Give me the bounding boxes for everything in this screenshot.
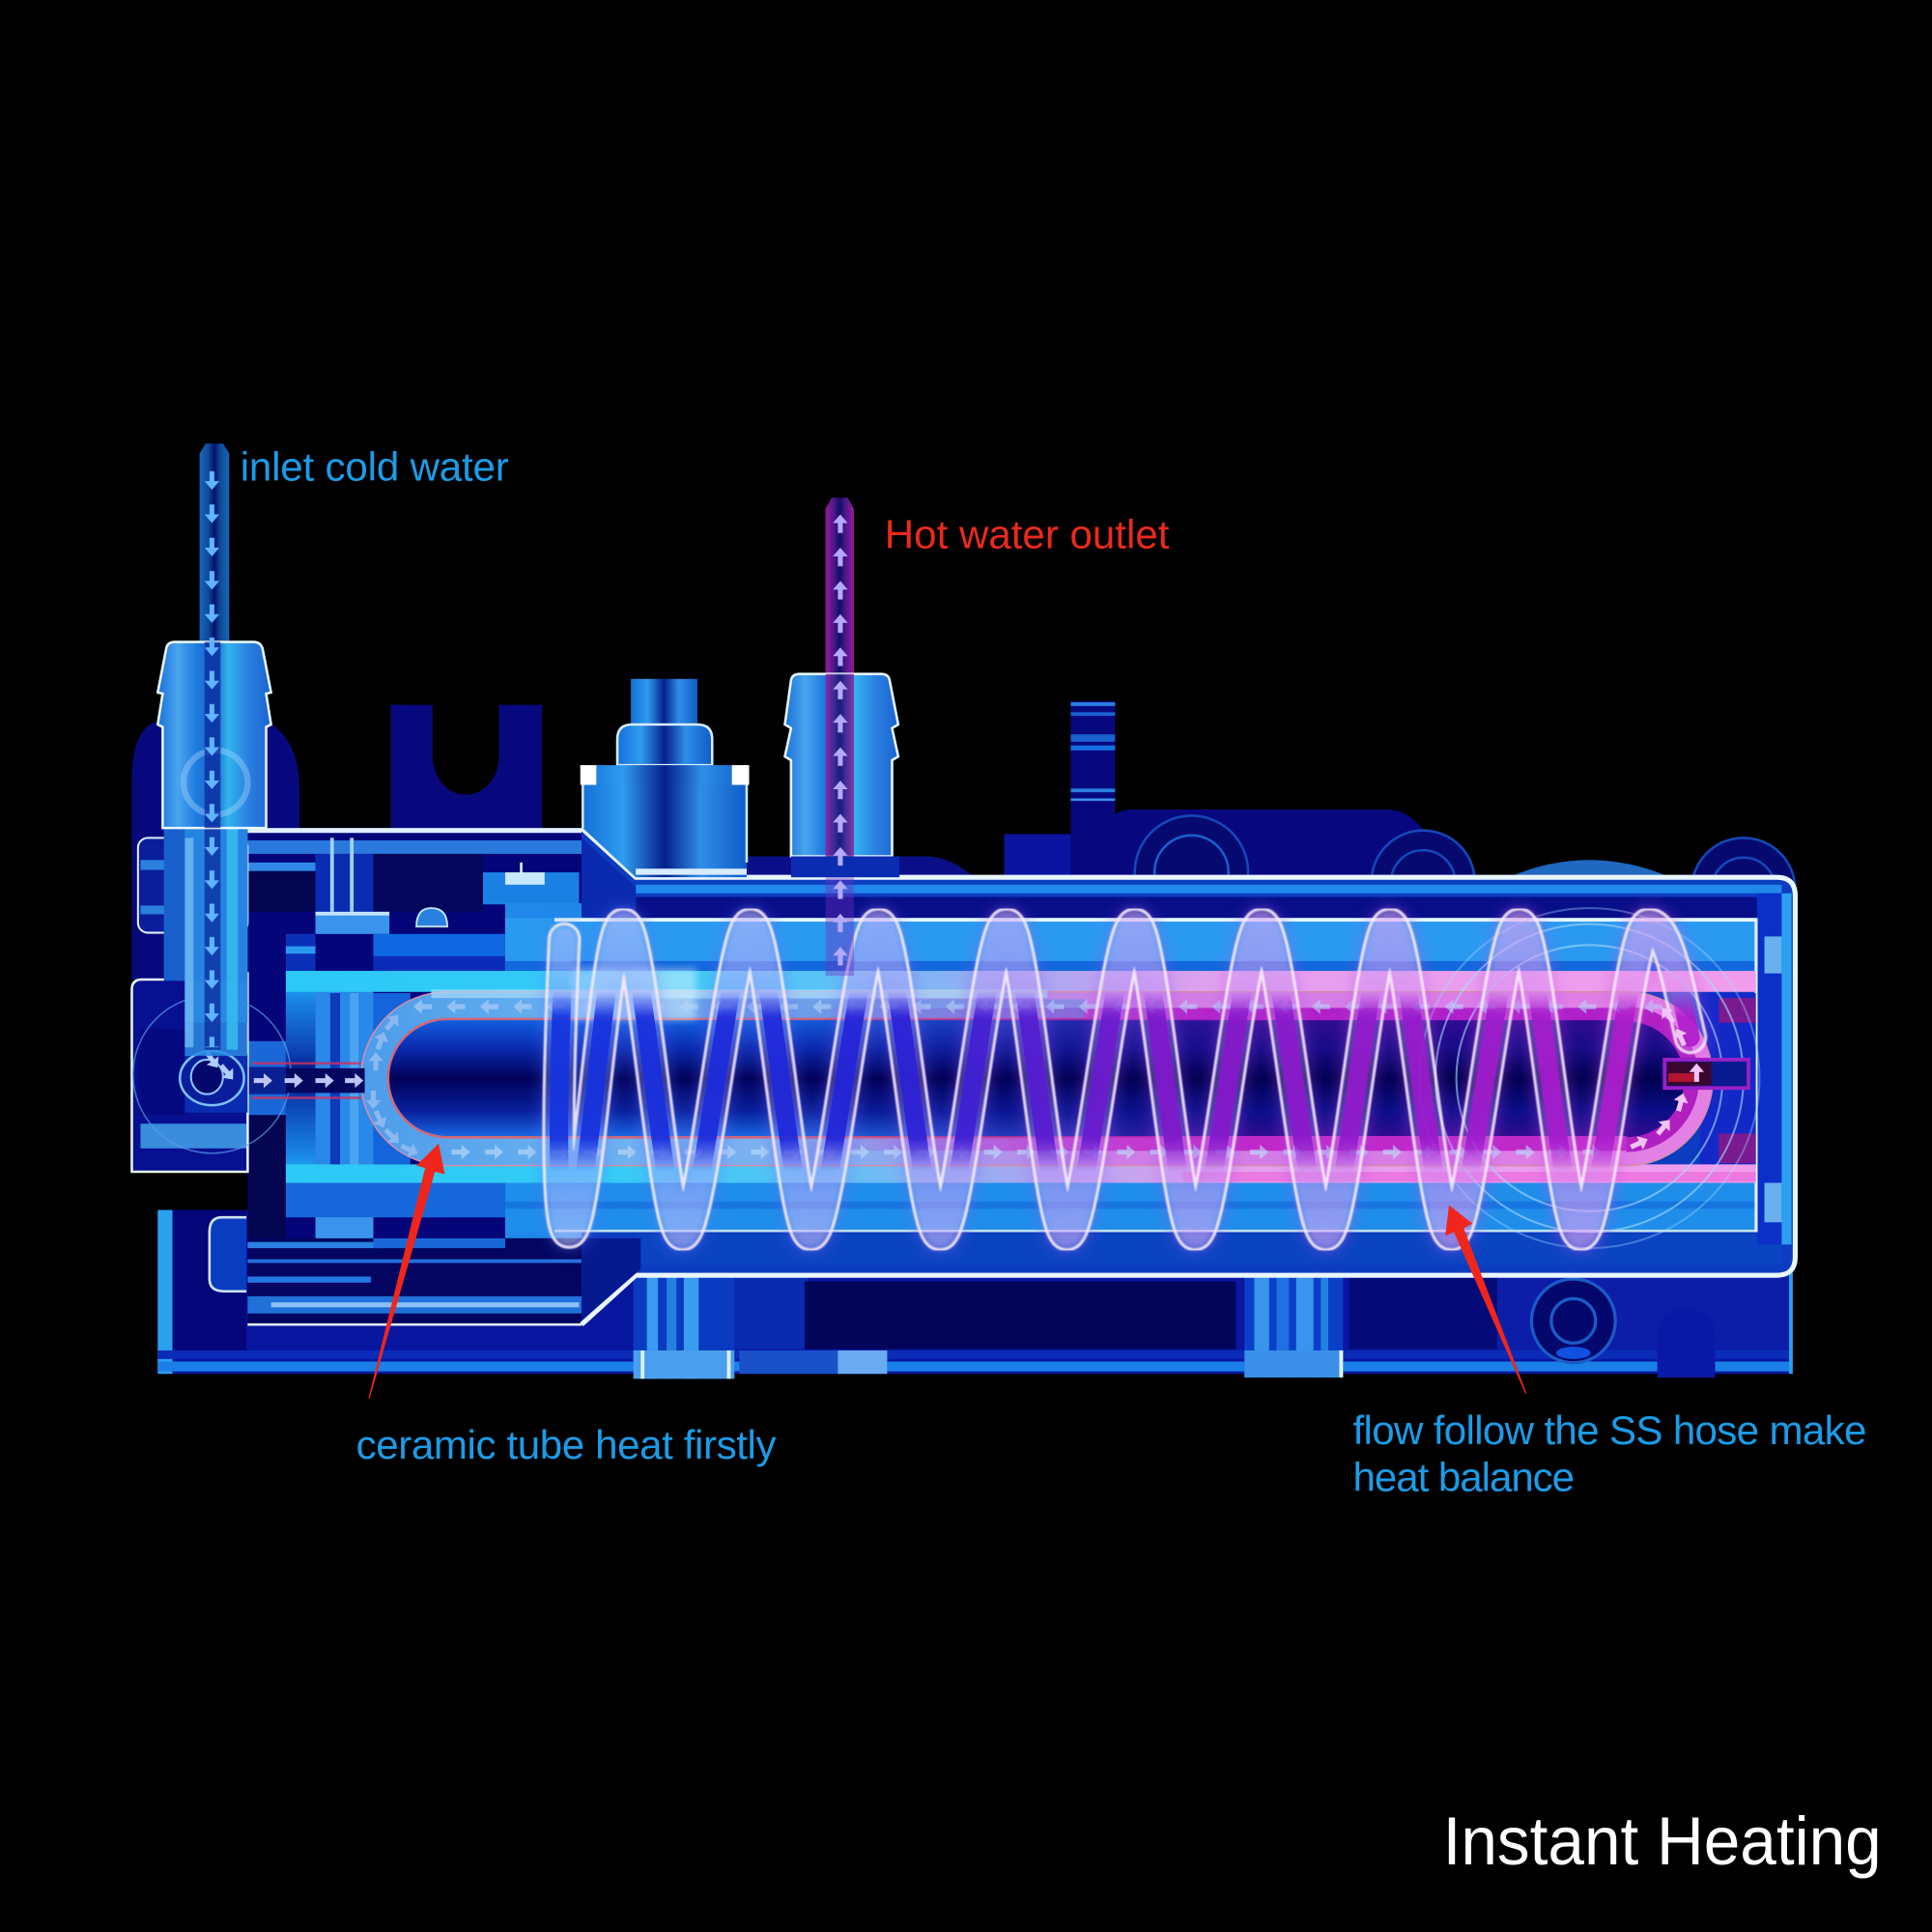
outlet end coupling: [1628, 1003, 1748, 1153]
main block outline: [131, 974, 247, 1172]
arched backdrop behind inlet: [131, 721, 299, 980]
lower right ring: [1531, 1279, 1615, 1363]
small rear block: [1005, 835, 1073, 884]
large disk behind tube end: [1386, 860, 1793, 1284]
infographic: instant heating water heater cross-section: [130, 443, 1878, 1878]
left housing: [247, 828, 589, 1325]
left inlet block: [131, 838, 365, 1172]
inlet pipe column: [164, 828, 247, 1056]
tall striped post: [1070, 701, 1115, 880]
centre fitting: [581, 679, 750, 877]
outlet arrows: [828, 508, 853, 974]
callout arrow: coil: [1445, 1205, 1526, 1394]
hot outlet barb fitting: [784, 674, 899, 976]
heated core, blue end: [388, 1019, 1687, 1137]
ceramic tube outer shell: [361, 992, 1713, 1166]
pale wash at coil start: [573, 969, 696, 1020]
heating coil: [518, 887, 1725, 1269]
inlet arrows: [200, 464, 224, 1047]
label: flow follow the SS hose: flow follow the SS hose make: [1353, 1407, 1866, 1453]
inlet barb fitting: [157, 642, 271, 828]
rear mounting rings: [1135, 815, 1795, 941]
label: heat balance: heat balance: [1353, 1454, 1575, 1499]
inner glass cylinder: [286, 918, 1758, 1233]
flow arrows inside tube: [366, 994, 1676, 1164]
arrows: upper return path: [407, 994, 1676, 1019]
end block behind magenta bend: [1700, 993, 1756, 1166]
label: inlet cold water: inlet cold water: [241, 443, 509, 489]
u-shaped bracket: [390, 705, 542, 838]
magenta inner rings: [788, 1008, 1691, 1151]
lower left pipe: [210, 1217, 246, 1292]
cross channel: [286, 1068, 365, 1093]
heated core, magenta end: [810, 1018, 1683, 1138]
label: ceramic tube heat firstly: ceramic tube heat firstly: [356, 1422, 777, 1467]
upper side pipes: [138, 838, 178, 933]
left striped column: [286, 971, 316, 1182]
vertical stripes at centre support: [1244, 1269, 1343, 1378]
arrows: lower forward path: [443, 1140, 1608, 1164]
ceramic tube bands: [286, 971, 1756, 1182]
arrows: u-turn left: [366, 1010, 421, 1160]
tube end rings: [1419, 908, 1759, 1248]
lower chassis: [157, 1210, 1793, 1378]
main outer tube: [582, 828, 1795, 1324]
hot water tube: [826, 497, 854, 674]
dark back plates: [131, 701, 1795, 1284]
lower right slot: [1658, 1309, 1716, 1378]
label: hot water outlet: Hot water outlet: [885, 512, 1170, 557]
hot outlet base hump: [739, 856, 974, 877]
title: instant heating: Instant Heating: [1443, 1803, 1882, 1879]
vertical stripes at left support: [634, 1269, 887, 1378]
rear mounting plate: [1104, 810, 1468, 877]
inlet tube: [200, 443, 229, 640]
callout arrow: ceramic tube: [368, 1144, 444, 1399]
coil bright edges: [541, 908, 1708, 1250]
